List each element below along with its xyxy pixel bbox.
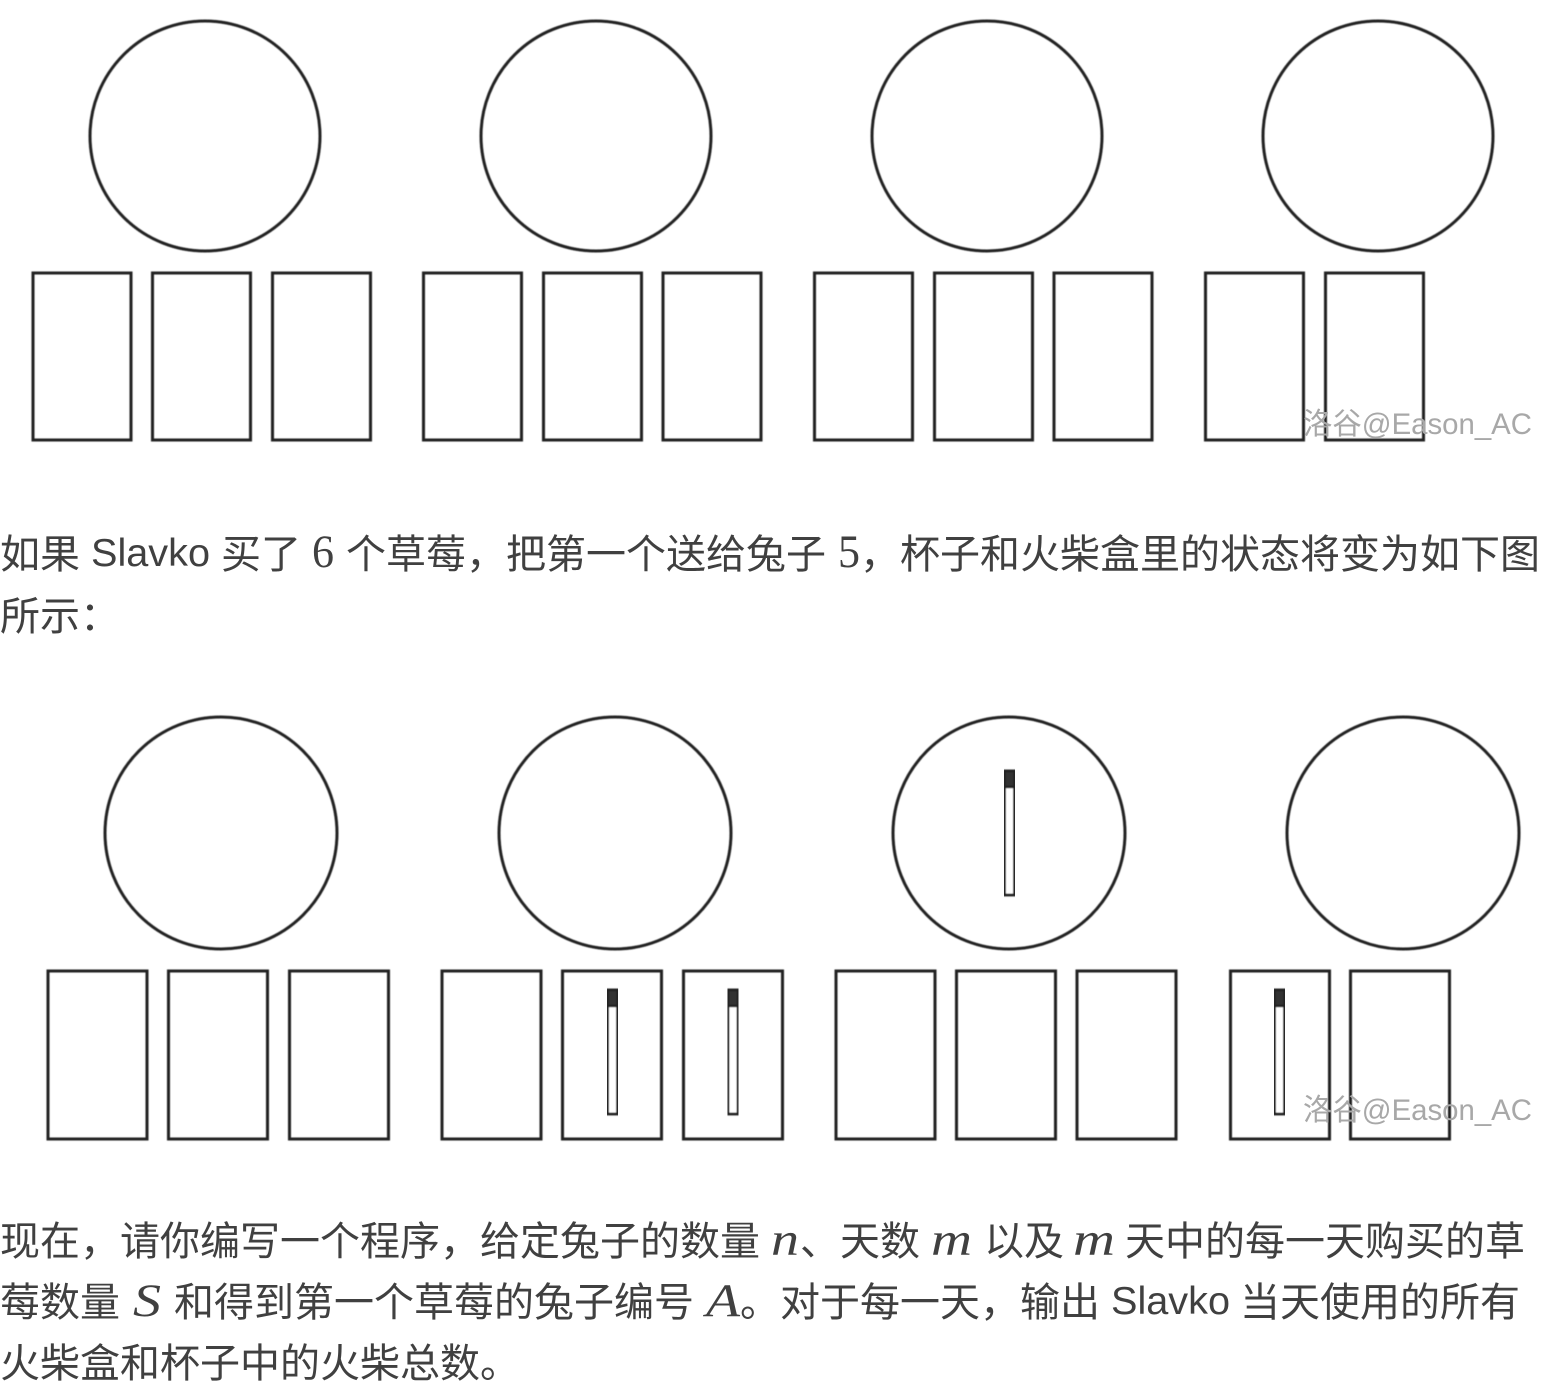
paragraph: Slavko buys 6 strawberries: 个草莓，把第一个送给兔子 bbox=[346, 533, 826, 577]
paragraph: program task: 现在，请你编写一个程序，给定兔子的数量 bbox=[0, 1220, 760, 1264]
watermark, initial diagram: 洛谷@Eason_AC bbox=[1303, 408, 1532, 441]
match in third cup bbox=[1004, 771, 1014, 895]
paragraph: Slavko buys 6 strawberries: 买了 bbox=[221, 533, 301, 577]
cups row, initial bbox=[90, 21, 1493, 251]
diagram: state after 6 strawberries bbox=[48, 717, 1532, 1139]
paragraph: program task: n bbox=[771, 1214, 799, 1266]
paragraph: program task: 当天使用的所有 bbox=[1240, 1281, 1520, 1325]
paragraph: program task: m bbox=[931, 1214, 972, 1266]
paragraph: program task: 火柴盒和杯子中的火柴总数。 bbox=[0, 1342, 520, 1386]
paragraph: Slavko buys 6 strawberries: 所示： bbox=[0, 595, 120, 639]
paragraph: program task bbox=[0, 1214, 1525, 1386]
match in matchbox 6 bbox=[728, 990, 738, 1114]
paragraph: program task: 以及 bbox=[984, 1220, 1064, 1264]
paragraph: program task: 天中的每一天购买的草 bbox=[1125, 1220, 1525, 1264]
paragraph: program task: S bbox=[133, 1275, 161, 1327]
paragraph: program task: 、天数 bbox=[800, 1220, 920, 1264]
paragraph: program task: m bbox=[1073, 1214, 1115, 1266]
match in matchbox 5 bbox=[608, 990, 618, 1114]
paragraph: program task: 和得到第一个草莓的兔子编号 bbox=[174, 1281, 694, 1325]
cups row, after bbox=[105, 717, 1519, 949]
paragraph: program task: A bbox=[702, 1275, 740, 1327]
paragraph: Slavko buys 6 strawberries bbox=[0, 526, 1540, 639]
paragraph: program task: Slavko bbox=[1111, 1280, 1230, 1323]
watermark, after diagram: 洛谷@Eason_AC bbox=[1303, 1094, 1532, 1127]
matchboxes row, after bbox=[48, 971, 1450, 1139]
paragraph: Slavko buys 6 strawberries: 5 bbox=[838, 526, 860, 578]
paragraph: program task: 莓数量 bbox=[0, 1281, 120, 1325]
paragraph: Slavko buys 6 strawberries: 6 bbox=[312, 526, 334, 578]
paragraph: Slavko buys 6 strawberries: 如果 bbox=[0, 533, 80, 577]
paragraph: program task: 。对于每一天，输出 bbox=[740, 1281, 1100, 1325]
paragraph: Slavko buys 6 strawberries: ，杯子和火柴盒里的状态将变为如下图 bbox=[860, 533, 1540, 577]
diagram: initial state, four rabbits bbox=[33, 21, 1532, 441]
matchboxes row, initial bbox=[33, 273, 1424, 440]
paragraph: Slavko buys 6 strawberries: Slavko bbox=[91, 532, 210, 575]
match in matchbox 10 bbox=[1274, 990, 1284, 1114]
